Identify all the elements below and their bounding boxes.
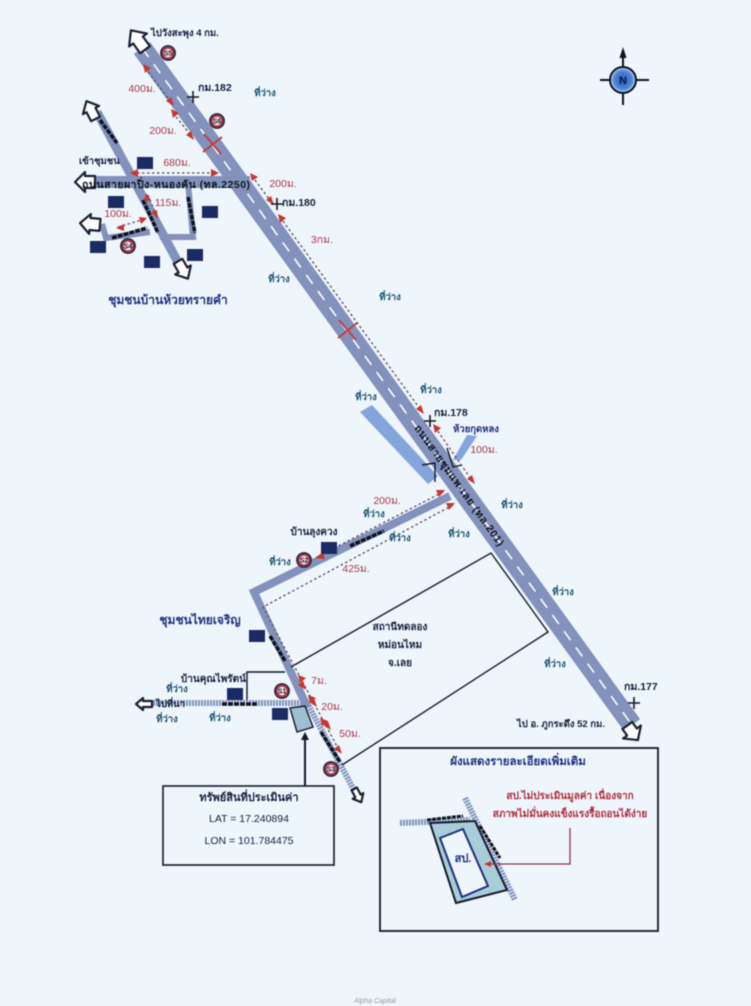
distance labels: 200ม. bbox=[269, 178, 297, 190]
distance labels: 115ม. bbox=[155, 197, 181, 209]
kilometre labels bbox=[198, 82, 658, 693]
property callout box bbox=[163, 786, 334, 865]
kilometre markers bbox=[187, 91, 640, 709]
inset checkered roads bbox=[400, 798, 515, 900]
vacant land labels: ที่ว่าง bbox=[420, 382, 442, 396]
vacant land labels: ที่ว่าง bbox=[544, 656, 566, 670]
inset building label: สป. bbox=[455, 852, 471, 865]
vacant land labels: ที่ว่าง bbox=[379, 289, 401, 303]
side road: Ban Lung Khuang branch bbox=[254, 496, 450, 707]
compass bbox=[600, 47, 649, 105]
house label: บ้านคุณไพรัตน์ bbox=[181, 672, 246, 685]
vacant land labels: ที่ว่าง bbox=[166, 681, 188, 695]
road label: highway 201: ถนนสายชุมแพ-เลย (ทล.201) bbox=[411, 423, 506, 549]
distance labels: 20ม. bbox=[321, 701, 343, 713]
vacant land labels: ที่ว่าง bbox=[254, 85, 276, 99]
vacant land labels: ที่ว่าง bbox=[268, 271, 290, 285]
community heading: Thai Charoen: ชุมชนไทยเจริญ bbox=[159, 612, 241, 628]
main highway bbox=[142, 48, 632, 725]
inset heading: ผังแสดงรายละเอียดเพิ่มเติม bbox=[450, 752, 586, 768]
station label: จ.เลย bbox=[388, 658, 412, 669]
survey badges: S3 bbox=[327, 766, 335, 774]
experimental station plot bbox=[291, 553, 548, 765]
label: to farm: ไปที่นา bbox=[155, 696, 185, 710]
survey badges: S4 bbox=[124, 244, 132, 250]
station label: หม่อนไหม bbox=[378, 638, 422, 651]
compass: N bbox=[619, 75, 627, 87]
distance labels: 100ม. bbox=[470, 444, 498, 456]
kilometre labels: กม.178 bbox=[434, 407, 468, 419]
station label bbox=[373, 621, 427, 669]
road crossings bbox=[203, 134, 357, 340]
destination label: Phu Kradueng: ไป อ. ภูกระดึง 52 กม. bbox=[516, 718, 605, 731]
vacant land labels: ที่ว่าง bbox=[363, 506, 385, 520]
distance labels: 7ม. bbox=[311, 675, 327, 687]
red arrowheads bbox=[116, 64, 475, 754]
streams bbox=[360, 405, 477, 484]
vacant land labels: ที่ว่าง bbox=[269, 554, 291, 568]
inset note: สภาพไม่มั่นคงแข็งแรงรื้อถอนได้ง่าย bbox=[493, 806, 647, 820]
inset power line bbox=[427, 816, 500, 858]
inset building bbox=[440, 829, 488, 897]
bridge brackets bbox=[422, 448, 462, 482]
distance labels: 200ม. bbox=[149, 125, 177, 137]
survey badges: S6 bbox=[213, 118, 221, 126]
appraised site bbox=[290, 706, 313, 732]
community heading: Huai Sai Kham: ชุมชนบ้านห้วยทรายคำ bbox=[108, 293, 228, 308]
road label: highway 2250: ถนนสายผาปิ่ง-หนองคัน (ทล.2250) bbox=[82, 176, 250, 191]
inset plot bbox=[430, 821, 507, 903]
side road network: Ban Huai Sai Kham bbox=[82, 112, 250, 266]
distance labels: 680ม. bbox=[163, 157, 191, 169]
vacant land labels: ที่ว่าง bbox=[209, 710, 231, 724]
power line markers bbox=[100, 120, 384, 762]
road end arrows bbox=[75, 24, 647, 805]
distance labels bbox=[104, 83, 498, 740]
house plot outline bbox=[247, 672, 285, 700]
stream label: ห้วยกุดหลง bbox=[453, 423, 499, 435]
vacant land labels: ที่ว่าง bbox=[448, 526, 470, 540]
property callout box: LAT = 17.240894 bbox=[209, 813, 289, 825]
property callout box: LON = 101.784475 bbox=[204, 835, 294, 847]
vacant land labels bbox=[156, 85, 574, 725]
survey badges: S2 bbox=[300, 558, 308, 564]
village label: Ban Lung Khuang: บ้านลุงควง bbox=[290, 526, 338, 538]
footer credit: Alpha Capital bbox=[353, 998, 396, 1005]
survey badges: S5 bbox=[164, 50, 172, 58]
distance labels: 100ม. bbox=[104, 208, 132, 220]
distance labels: 3กม. bbox=[311, 234, 333, 246]
inset leader line bbox=[484, 828, 570, 867]
label: enter community: เข้าชุมชน bbox=[79, 155, 120, 167]
distance labels: 400ม. bbox=[128, 83, 156, 95]
vacant land labels: ที่ว่าง bbox=[389, 530, 411, 544]
houses bbox=[90, 157, 337, 720]
inset note bbox=[493, 788, 647, 820]
vacant land labels: ที่ว่าง bbox=[552, 584, 574, 598]
vacant land labels: ที่ว่าง bbox=[156, 711, 178, 725]
distance labels: 200ม. bbox=[373, 495, 401, 507]
checkered lanes bbox=[150, 690, 354, 790]
vacant land labels: ที่ว่าง bbox=[355, 389, 377, 403]
distance dashed lines bbox=[118, 68, 473, 752]
kilometre labels: กม.177 bbox=[624, 681, 658, 693]
site pointer arrow bbox=[301, 732, 309, 786]
destination label: Wang Saphung: ไปวังสะพุง 4 กม. bbox=[150, 27, 219, 39]
property callout box: ทรัพย์สินที่ประเมินค่า bbox=[199, 789, 299, 804]
inset note: สป.ไม่ประเมินมูลค่า เนื่องจาก bbox=[506, 788, 634, 803]
distance labels: 50ม. bbox=[339, 728, 361, 740]
inset panel: additional details bbox=[380, 748, 658, 931]
station label: สถานีทดลอง bbox=[373, 621, 427, 633]
kilometre labels: กม.180 bbox=[282, 197, 316, 209]
vacant land labels: ที่ว่าง bbox=[501, 497, 523, 511]
survey badges: S1 bbox=[278, 688, 286, 696]
kilometre labels: กม.182 bbox=[198, 82, 232, 94]
survey badges bbox=[121, 46, 338, 776]
distance labels: 425ม. bbox=[342, 563, 370, 575]
